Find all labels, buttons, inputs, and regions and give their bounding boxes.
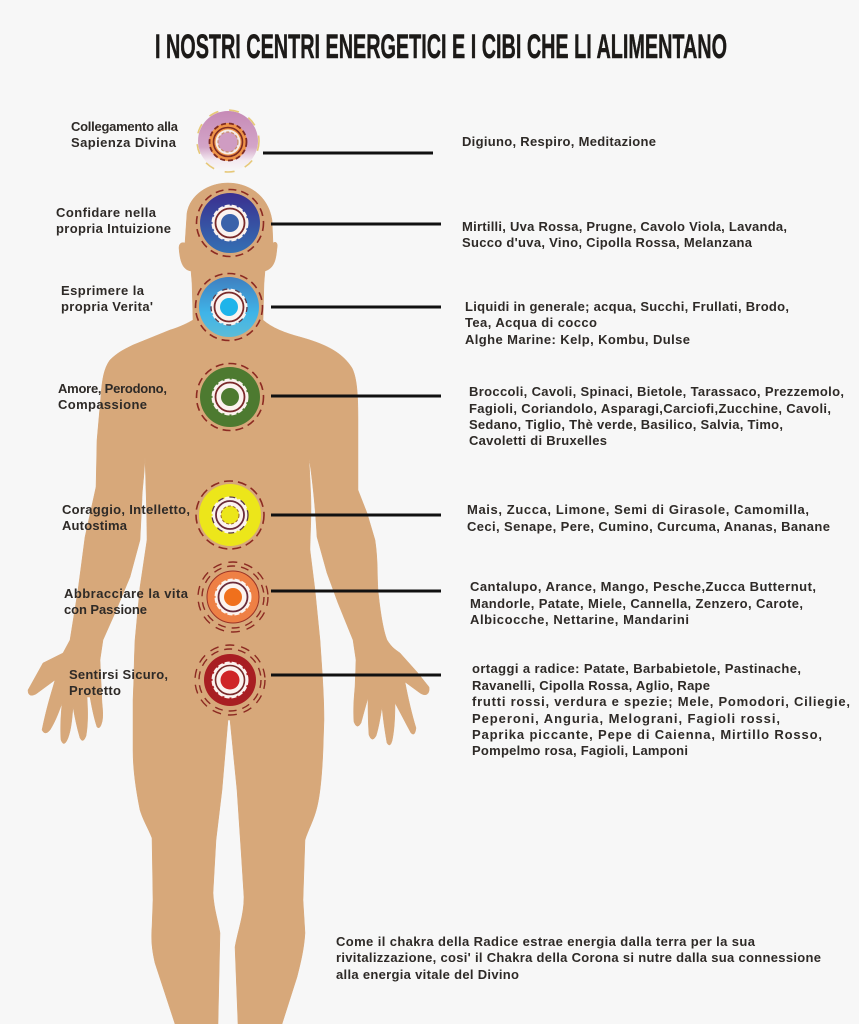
right text: solar plexus foods: Ceci, Senape, Pere, Cumino, Curcuma, Ananas, Banane: [467, 519, 830, 534]
right text: root foods: Ravanelli, Cipolla Rossa, Aglio, Rape: [472, 678, 710, 693]
right text: root foods: [472, 661, 850, 758]
left labels: propria Intuizione: [56, 221, 171, 236]
left labels: propria Verita': [61, 299, 153, 314]
left labels: Abbracciare la vita: [64, 586, 189, 601]
right text: throat foods: Liquidi in generale; acqua, Succhi, Frullati, Brodo,: [465, 299, 789, 314]
left labels: [56, 119, 190, 698]
chakra: third eye: [196, 190, 264, 256]
right text: sacral foods: [470, 579, 816, 627]
left labels: Compassione: [58, 397, 147, 412]
right text: sacral foods: Albicocche, Nettarine, Mandarini: [470, 612, 689, 627]
right text: third eye foods: [462, 219, 787, 250]
chakra: crown: [197, 110, 259, 172]
left labels: Coraggio, Intelletto,: [62, 502, 190, 517]
right text: third eye foods: Mirtilli, Uva Rossa, Prugne, Cavolo Viola, Lavanda,: [462, 219, 787, 234]
left labels: con Passione: [64, 602, 147, 617]
right text: root foods: frutti rossi, verdura e spezie; Mele, Pomodori, Ciliegie,: [472, 694, 850, 709]
left labels: Confidare nella: [56, 205, 157, 220]
footer note: Come il chakra della Radice estrae energia dalla terra per la sua: [336, 934, 756, 949]
right text: root foods: Pompelmo rosa, Fagioli, Lamponi: [472, 743, 688, 758]
right text: heart foods: Fagioli, Coriandolo, Asparagi,Carciofi,Zucchine, Cavoli,: [469, 401, 831, 416]
right text: heart foods: Cavoletti di Bruxelles: [469, 433, 607, 448]
left labels: Esprimere la: [61, 283, 145, 298]
footer note: rivitalizzazione, cosi' il Chakra della Corona si nutre dalla sua connessione: [336, 950, 821, 965]
right text: solar plexus foods: [467, 502, 830, 534]
connector lines: [263, 153, 441, 675]
right text: throat foods: [465, 299, 789, 347]
chakra: throat: [196, 274, 262, 340]
right text: root foods: Paprika piccante, Pepe di Caienna, Mirtillo Rosso,: [472, 727, 822, 742]
right text: root foods: ortaggi a radice: Patate, Barbabietole, Pastinache,: [472, 661, 801, 676]
right text: throat foods: Tea, Acqua di cocco: [465, 315, 597, 330]
left labels: Amore, Perodono,: [58, 381, 167, 396]
left labels: Sapienza Divina: [71, 135, 177, 150]
right text: heart foods: [469, 384, 844, 448]
chakra: root: [195, 645, 265, 715]
footer note: [336, 934, 821, 982]
right text: root foods: Peperoni, Anguria, Melograni, Fagioli rossi,: [472, 711, 780, 726]
chakra: heart: [196, 364, 264, 430]
human body silhouette: [28, 183, 429, 1024]
right text: third eye foods: Succo d'uva, Vino, Cipolla Rossa, Melanzana: [462, 235, 753, 250]
chakra: sacral: [198, 562, 268, 632]
right text: heart foods: Broccoli, Cavoli, Spinaci, Bietole, Tarassaco, Prezzemolo,: [469, 384, 844, 399]
left labels: Autostima: [62, 518, 128, 533]
chakra: solar plexus: [196, 481, 264, 549]
right text: sacral foods: Mandorle, Patate, Miele, Cannella, Zenzero, Carote,: [470, 596, 803, 611]
right text: sacral foods: Cantalupo, Arance, Mango, Pesche,Zucca Butternut,: [470, 579, 816, 594]
right text: heart foods: Sedano, Tiglio, Thè verde, Basilico, Salvia, Timo,: [469, 417, 783, 432]
left labels: Sentirsi Sicuro,: [69, 667, 168, 682]
footer note: alla energia vitale del Divino: [336, 967, 519, 982]
right text: crown foods: Digiuno, Respiro, Meditazione: [462, 134, 656, 149]
right text: throat foods: Alghe Marine: Kelp, Kombu, Dulse: [465, 332, 690, 347]
left labels: Protetto: [69, 683, 121, 698]
left labels: Collegamento alla: [71, 119, 179, 134]
right text: solar plexus foods: Mais, Zucca, Limone, Semi di Girasole, Camomilla,: [467, 502, 809, 517]
